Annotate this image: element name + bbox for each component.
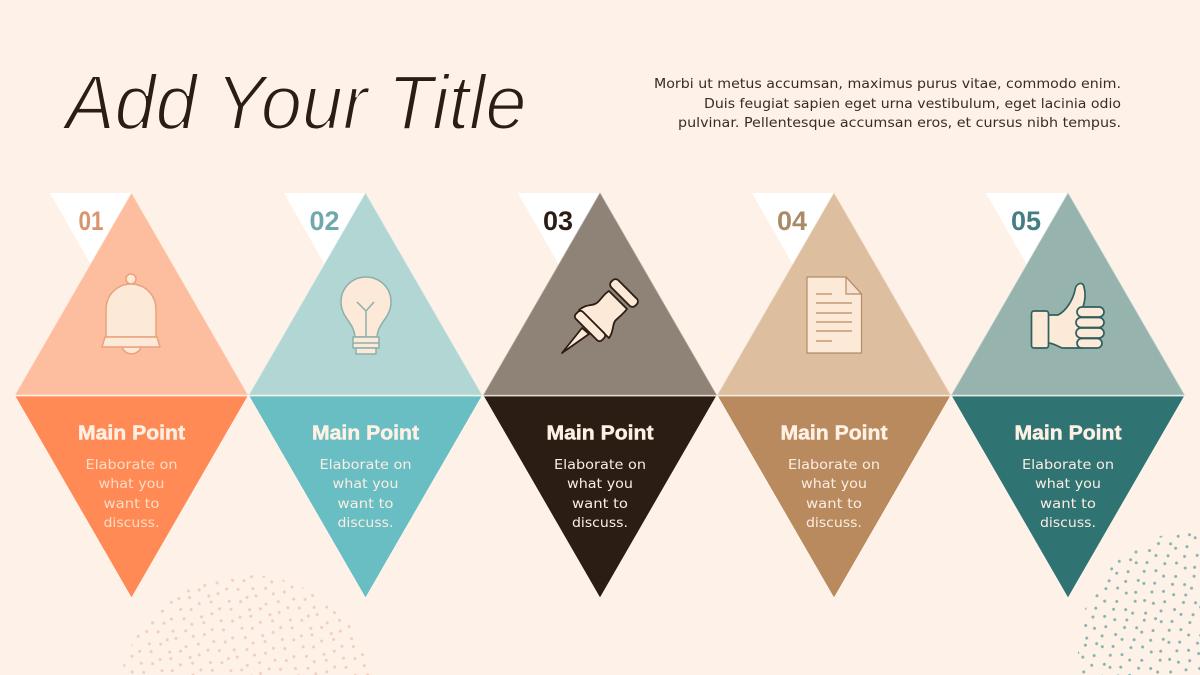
description 03: want to — [572, 496, 628, 512]
description 02: what you — [332, 476, 398, 492]
description 03 — [554, 457, 646, 531]
description 02 — [320, 457, 412, 531]
description 05: what you — [1035, 476, 1101, 492]
heading 03: Main Point — [546, 422, 654, 444]
heading 04: Main Point — [780, 422, 888, 444]
description 02: discuss. — [338, 515, 394, 531]
panel: point 01 — [15, 193, 248, 598]
description 05: Elaborate on — [1022, 457, 1114, 473]
description 05 — [1022, 457, 1114, 531]
number tab 02 — [284, 193, 366, 265]
panel: point 03 — [484, 193, 716, 598]
number tab 03: 03 — [543, 206, 573, 236]
upper triangle 01 — [15, 193, 248, 395]
lower triangle 03 — [484, 396, 716, 598]
upper triangle 03 — [484, 193, 716, 395]
description 01 — [86, 457, 178, 531]
icon: bell — [102, 274, 160, 354]
panel: point 04 — [718, 193, 950, 598]
description 04: Elaborate on — [788, 457, 880, 473]
description 01: discuss. — [104, 515, 160, 531]
lower triangle 04 — [718, 396, 950, 598]
description 05: discuss. — [1040, 515, 1096, 531]
description 04: what you — [801, 476, 867, 492]
description 03: Elaborate on — [554, 457, 646, 473]
upper triangle 02 — [249, 193, 482, 395]
description 04: discuss. — [806, 515, 862, 531]
description 04 — [788, 457, 880, 531]
heading 02: Main Point — [312, 422, 419, 444]
dotted semicircle: bottom centre-left — [120, 575, 374, 675]
number tab 04 — [752, 193, 835, 265]
number tab 04: 04 — [777, 206, 807, 236]
lower triangle 05 — [952, 396, 1184, 598]
icon: light bulb — [341, 277, 391, 354]
intro text block: pulvinar. Pellentesque accumsan eros, et cursus nibh tempus. — [678, 116, 1121, 131]
upper triangle 05 — [952, 193, 1184, 395]
description 01: what you — [98, 476, 164, 492]
icon: document — [807, 277, 862, 353]
description 02: Elaborate on — [320, 457, 412, 473]
title: Add Your Title — [62, 60, 526, 146]
number tab 03 — [518, 193, 601, 265]
intro text block: Morbi ut metus accumsan, maximus purus vitae, commodo enim. — [654, 77, 1121, 92]
panel: point 05 — [952, 193, 1184, 598]
intro text block: Duis feugiat sapien eget urna vestibulum, eget lacinia odio — [704, 97, 1121, 112]
number tab 01: 01 — [78, 206, 104, 236]
icon: push pin — [562, 277, 640, 353]
intro text block — [654, 77, 1121, 131]
description 01: want to — [104, 496, 160, 512]
description 05: want to — [1040, 496, 1096, 512]
upper triangle 04 — [718, 193, 950, 395]
number tab 05: 05 — [1011, 206, 1041, 236]
description 01: Elaborate on — [86, 457, 178, 473]
panel: point 02 — [249, 193, 482, 598]
lower triangle 01 — [15, 396, 248, 598]
number tab 05 — [986, 193, 1069, 265]
heading 05: Main Point — [1014, 422, 1122, 444]
icon: thumbs up — [1032, 283, 1104, 348]
number tab 02: 02 — [309, 206, 340, 236]
description 04: want to — [806, 496, 862, 512]
lower triangle 02 — [249, 396, 482, 598]
dotted semicircle: bottom right — [1078, 530, 1200, 675]
description 03: what you — [567, 476, 633, 492]
heading 01: Main Point — [78, 422, 185, 444]
number tab 01 — [50, 193, 132, 265]
description 03: discuss. — [572, 515, 628, 531]
description 02: want to — [338, 496, 394, 512]
